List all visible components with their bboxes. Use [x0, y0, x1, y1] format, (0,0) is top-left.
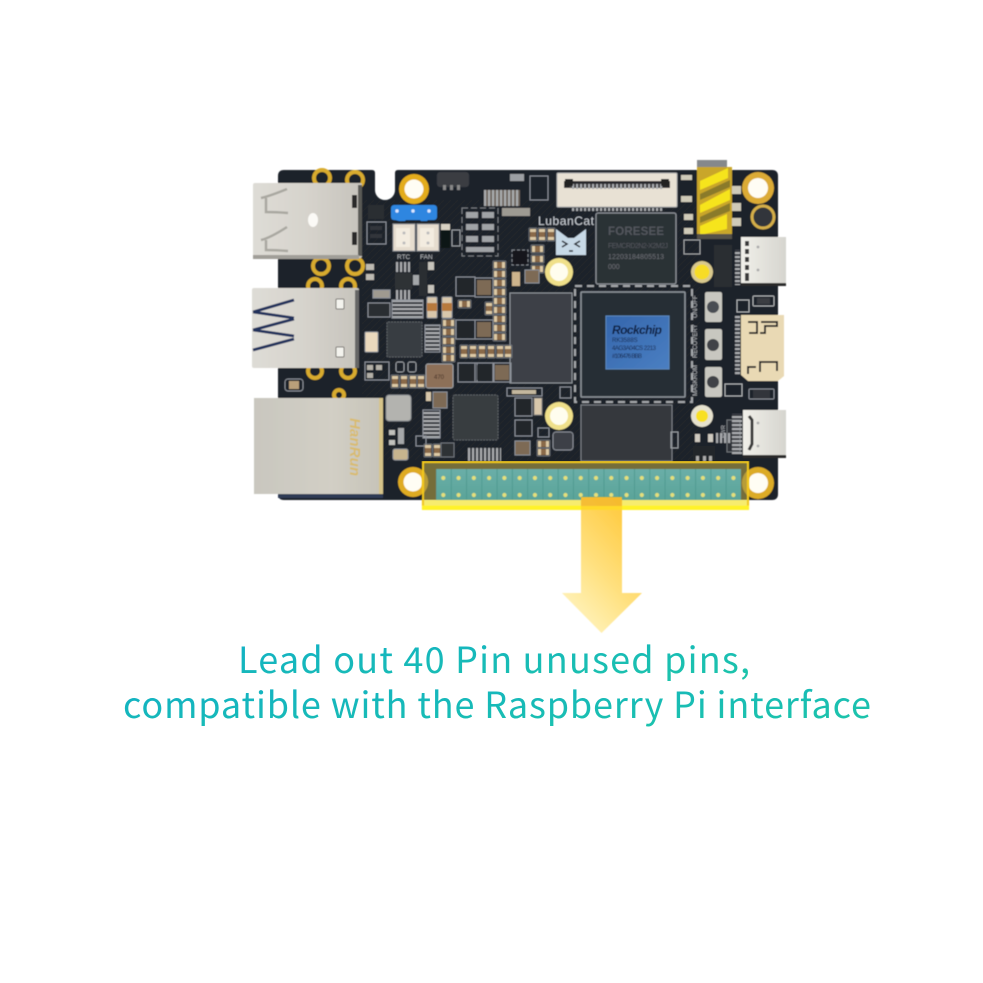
mounting hole top left — [399, 174, 429, 204]
mid hole lower — [545, 402, 573, 430]
small capacitor left — [285, 379, 303, 391]
dashed chip surround — [575, 286, 692, 402]
USB-A 3.0 port — [252, 288, 359, 368]
memory chip: 000 — [608, 264, 620, 271]
FAN label: FAN — [420, 254, 433, 261]
SoC die: 4AG3A04CS 2213 — [612, 346, 657, 352]
memory chip: FORESEE — [608, 226, 664, 238]
silk labels and buttons — [681, 175, 774, 461]
brand text: HanRun — [346, 418, 363, 476]
ethernet port — [254, 398, 383, 498]
mounting hole bottom left — [398, 467, 428, 497]
caption: compatible with the Raspberry Pi interface — [123, 677, 871, 729]
RTC label: RTC — [397, 254, 411, 261]
pin header — [436, 469, 741, 500]
mounting pads under ports — [308, 170, 363, 400]
FAN connector — [417, 224, 439, 251]
mounting hole bottom right — [742, 467, 774, 499]
button on/off — [705, 292, 722, 322]
HDMI port — [741, 315, 784, 381]
40-pin highlight box — [422, 462, 749, 510]
board outline — [278, 170, 778, 500]
mounting hole top right — [742, 172, 774, 204]
mid hole upper — [545, 258, 573, 286]
caption — [123, 632, 871, 729]
bottom chip — [581, 405, 678, 461]
silk labels and buttons: ON/OFF — [693, 295, 699, 318]
audio jack — [697, 160, 732, 239]
camera FFC connector — [557, 173, 677, 211]
left IC cluster: 470 — [434, 375, 445, 381]
silk labels and buttons: MASKROM — [693, 365, 699, 396]
circuit board — [252, 160, 786, 510]
left IC cluster — [365, 262, 501, 461]
SoC die: Rockchip — [612, 323, 662, 337]
memory chip — [596, 213, 676, 284]
button maskrom — [705, 367, 722, 397]
memory chip: 12203184805513 — [608, 254, 664, 261]
top left small parts — [367, 172, 548, 256]
components column — [427, 261, 512, 382]
USB-C port top — [741, 237, 786, 286]
SoC die — [606, 316, 669, 369]
cat icon — [556, 229, 586, 255]
ring pad right — [752, 206, 774, 228]
button recovery — [705, 329, 722, 360]
LubanCat logo: LubanCat — [538, 214, 595, 228]
Rockchip SoC — [581, 292, 685, 397]
blue jumper — [391, 205, 437, 221]
memory chip: FEMCRD2N2-X2M2J — [608, 243, 668, 250]
caption: Lead out 40 Pin unused pins, — [238, 632, 750, 684]
caps by logo — [512, 228, 555, 286]
RTC connector — [393, 224, 415, 251]
SoC die: #106476 BBB — [612, 354, 642, 360]
arrow — [562, 497, 642, 633]
USB-A port top — [253, 183, 362, 259]
USB-C port bottom — [743, 410, 786, 458]
DDR chip left — [510, 293, 572, 383]
yellow test pad upper — [691, 261, 713, 283]
LubanCat logo — [538, 214, 595, 255]
lower mid parts — [507, 387, 573, 456]
yellow test pad lower — [691, 405, 713, 427]
SoC die: RK3588S — [612, 338, 638, 344]
silk labels and buttons: PWR — [721, 425, 727, 438]
silk labels and buttons: RECOVERY — [693, 324, 699, 358]
